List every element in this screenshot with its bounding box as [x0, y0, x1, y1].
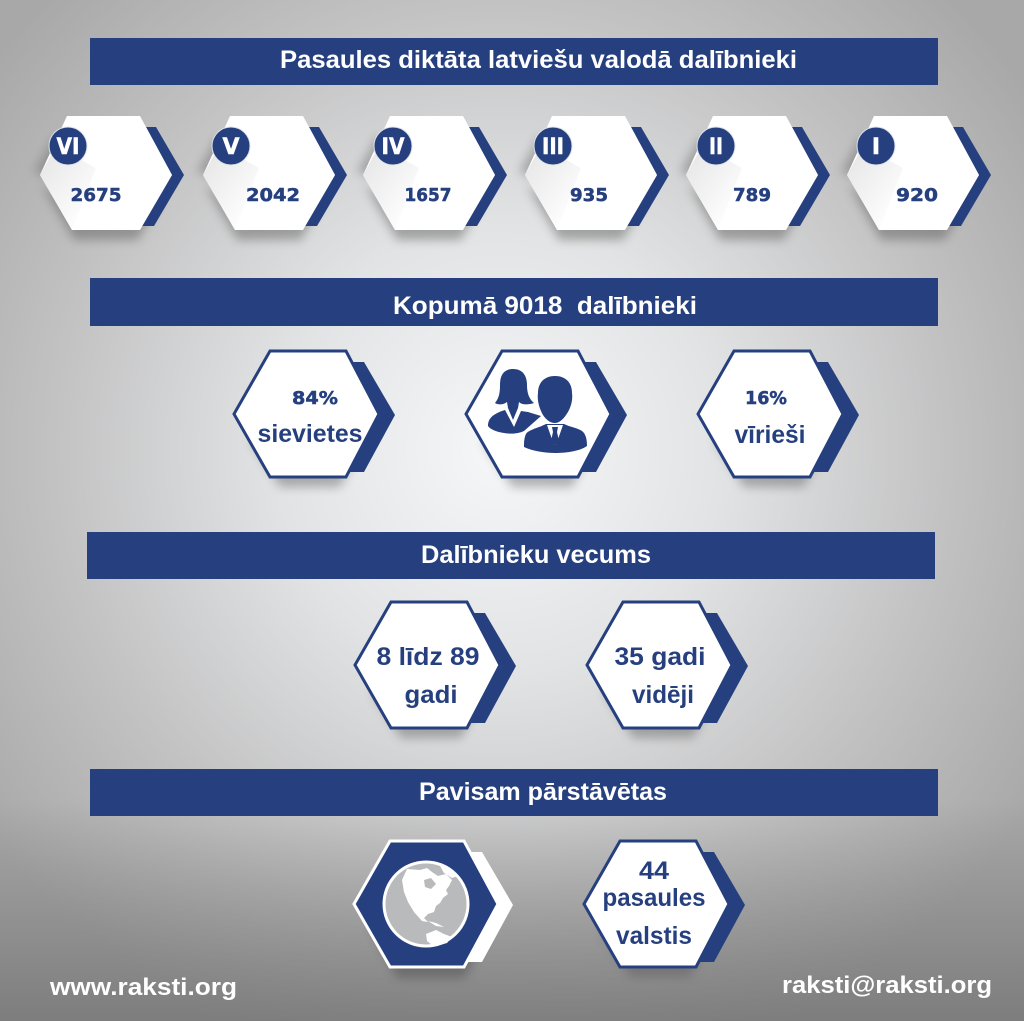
heading: represented	[90, 769, 938, 816]
heading: represented: Pavisam pārstāvētas	[419, 778, 667, 806]
heading: total	[90, 278, 938, 326]
badge: V	[212, 127, 250, 165]
label: vīrieši: vīrieši	[734, 421, 806, 449]
label: vidēji: vidēji	[632, 681, 694, 709]
value: 789: 789	[733, 185, 771, 206]
badge: IV: IV	[382, 135, 404, 160]
badge: III: III	[542, 135, 564, 160]
panel: round VI	[34, 116, 184, 240]
badge: VI: VI	[56, 135, 80, 160]
badge: II	[697, 127, 735, 165]
panel: round IV	[357, 116, 507, 240]
panel: people icon	[466, 351, 627, 487]
label: 8 līdz 89: 8 līdz 89	[376, 643, 480, 671]
panel: age range	[355, 602, 516, 738]
label: 44: 44	[639, 857, 669, 885]
panel: round I	[841, 116, 991, 240]
panel: round II	[680, 116, 830, 240]
badge: III	[534, 127, 572, 165]
panel: round III	[519, 116, 669, 240]
badge: II: II	[709, 135, 723, 160]
label: sievietes: sievietes	[258, 420, 362, 448]
heading: participants: Pasaules diktāta latviešu valodā dalībnieki	[280, 46, 797, 74]
value: 935: 935	[570, 185, 608, 206]
value: 2675: 2675	[70, 185, 122, 206]
value: 16%: 16%	[745, 388, 787, 409]
value: 920: 920	[896, 185, 938, 206]
label: pasaules: pasaules	[602, 884, 706, 912]
panel: countries	[584, 841, 745, 977]
panel: round V	[197, 116, 347, 240]
icon: globe	[384, 862, 468, 946]
heading: age	[87, 532, 935, 579]
badge: V: V	[222, 135, 240, 160]
panel: average age	[587, 602, 748, 738]
badge: I: I	[872, 135, 880, 160]
heading: participants	[90, 38, 938, 85]
panel: men	[698, 351, 859, 487]
footer: email: raksti@raksti.org	[782, 972, 992, 999]
label: 35 gadi: 35 gadi	[614, 643, 706, 671]
label: valstis: valstis	[616, 922, 692, 950]
value: 2042: 2042	[246, 185, 300, 206]
value: 84%: 84%	[292, 388, 338, 409]
badge: IV	[374, 127, 412, 165]
badge: I	[857, 127, 895, 165]
label: gadi: gadi	[404, 681, 458, 709]
panel: globe	[354, 841, 513, 978]
panel: women	[234, 351, 395, 487]
heading: total: Kopumā 9018 dalībnieki	[393, 292, 697, 320]
heading: age: Dalībnieku vecums	[421, 541, 651, 569]
icon: woman and man	[488, 369, 587, 453]
badge: VI	[49, 127, 87, 165]
value: 1657: 1657	[404, 185, 452, 206]
footer: website: www.raksti.org	[49, 974, 237, 1001]
